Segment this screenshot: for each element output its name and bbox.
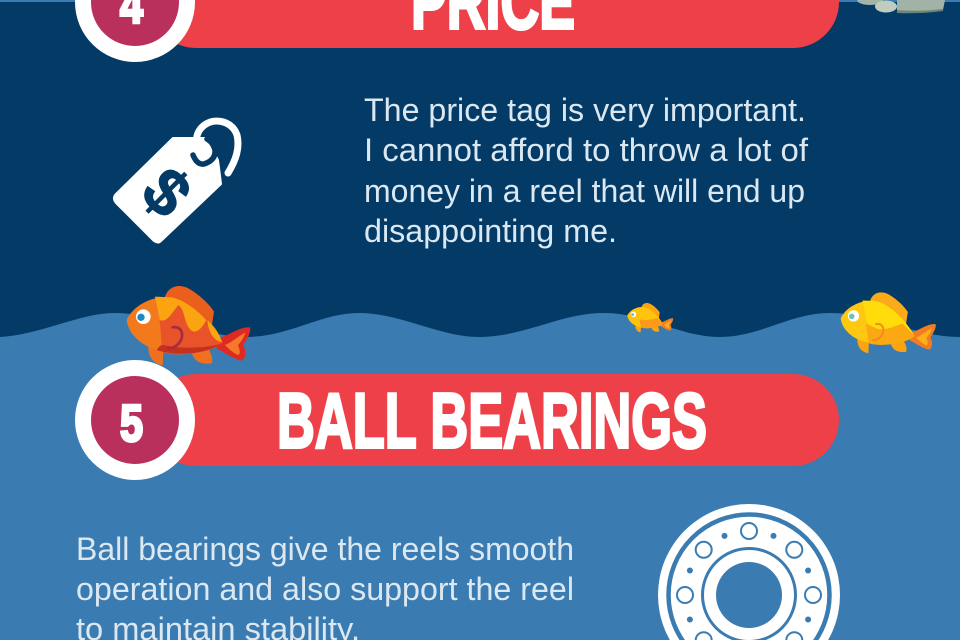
text block: ball bearings description: Ball bearings give the reels smooth [76,531,574,567]
icon: small yellow fish [627,303,673,332]
heading: ball bearings: BALL BEARINGS [277,376,707,464]
icon: rocks at top right [857,0,945,13]
number badge 4 [75,0,195,62]
panel: price section [75,0,945,249]
icon: price tag [114,121,238,242]
icon: ball bearing [658,504,840,640]
ball bearings banner [150,374,839,466]
text block: price description: disappointing me. [364,213,617,249]
text block: price description [364,92,808,249]
text block: price description: money in a reel that will end up [364,173,805,209]
icon: price tag: $ [128,153,206,231]
text block: price description: I cannot afford to throw a lot of [364,132,808,168]
wave: lighter water panel [0,313,960,640]
icon: medium yellow fish [841,292,936,353]
number badge 5: 5 [120,395,143,453]
icon: large orange fish [127,286,250,365]
panel: ball bearings section [75,360,840,640]
text block: price description: The price tag is very important. [364,92,806,128]
price banner [150,0,839,48]
text block: ball bearings description [76,531,574,640]
number badge 5 [75,360,195,480]
text block: ball bearings description: operation and also support the reel [76,571,574,607]
